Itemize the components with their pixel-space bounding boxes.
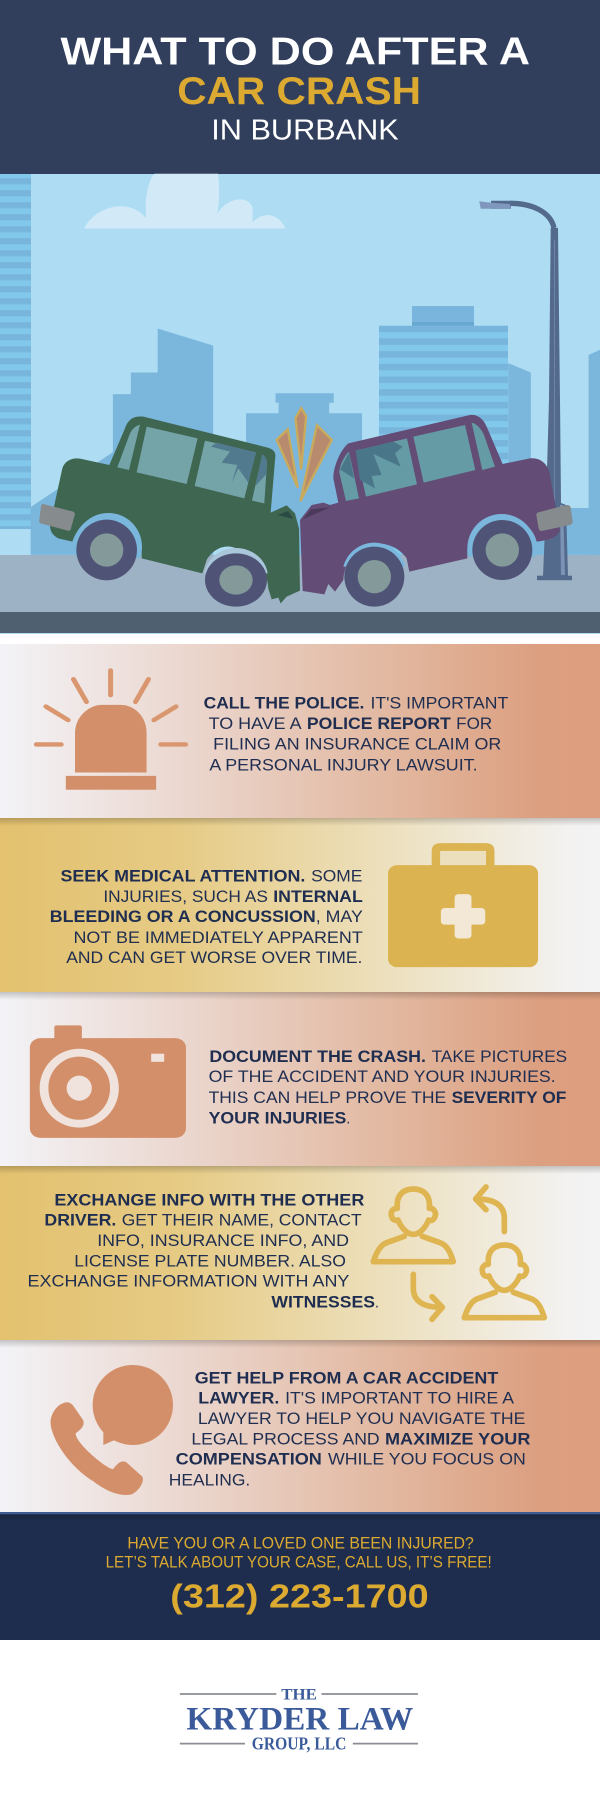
text: call the police: CALL THE POLICE. bbox=[204, 693, 364, 712]
illustration: city crash scene bbox=[0, 174, 600, 634]
text: get help from a lawyer: MAXIMIZE YOUR bbox=[385, 1430, 530, 1448]
text: seek medical attention: BLEEDING OR A CONCUSSION bbox=[50, 907, 316, 926]
title: WHAT TO DO AFTER A bbox=[60, 29, 530, 73]
text: seek medical attention: NOT BE IMMEDIATELY APPARENT bbox=[73, 928, 363, 947]
panel: get help from a lawyer bbox=[0, 1340, 600, 1512]
text: call the police: A PERSONAL INJURY LAWSUIT. bbox=[209, 755, 478, 774]
title bbox=[60, 29, 530, 146]
text: exchange info: EXCHANGE INFORMATION WITH ANY bbox=[28, 1272, 349, 1290]
text: get help from a lawyer bbox=[169, 1369, 530, 1489]
text: seek medical attention: AND CAN GET WORSE OVER TIME. bbox=[66, 948, 362, 967]
text: get help from a lawyer: COMPENSATION bbox=[176, 1450, 322, 1468]
road bbox=[0, 555, 600, 613]
text: get help from a lawyer: WHILE YOU FOCUS ON bbox=[328, 1450, 526, 1468]
call to action text: (312) 223-1700 bbox=[170, 1578, 429, 1615]
text: call the police: TO HAVE A bbox=[209, 714, 302, 733]
text: seek medical attention: , MAY bbox=[316, 907, 363, 926]
text: document the crash: SEVERITY OF bbox=[452, 1088, 566, 1107]
call to action text: LET’S TALK ABOUT YOUR CASE, CALL US, IT’S FREE! bbox=[106, 1553, 492, 1571]
title: IN BURBANK bbox=[211, 114, 399, 146]
panel: call the police bbox=[0, 644, 600, 818]
text: seek medical attention bbox=[50, 867, 363, 967]
logo: the kryder law group: THE bbox=[281, 1685, 317, 1703]
impact burst bbox=[277, 408, 332, 501]
text: seek medical attention: INTERNAL bbox=[273, 887, 363, 906]
text: get help from a lawyer: LAWYER. bbox=[198, 1389, 279, 1407]
text: document the crash: TAKE PICTURES bbox=[432, 1047, 567, 1066]
header panel bbox=[0, 0, 600, 174]
text: exchange info: LICENSE PLATE NUMBER. ALSO bbox=[74, 1252, 346, 1270]
text: exchange info: DRIVER. bbox=[44, 1211, 116, 1229]
text: exchange info: WITNESSES bbox=[271, 1293, 375, 1311]
building: left tower bbox=[0, 174, 31, 529]
call to action text: HAVE YOU OR A LOVED ONE BEEN INJURED? bbox=[127, 1534, 474, 1552]
text: seek medical attention: SOME bbox=[311, 867, 362, 885]
icon: phone and speech bubble bbox=[51, 1365, 173, 1495]
purple car bbox=[300, 415, 573, 607]
logo: the kryder law group: GROUP, LLC bbox=[252, 1734, 346, 1754]
icon: camera bbox=[30, 1025, 186, 1138]
text: call the police bbox=[204, 693, 508, 774]
title: CAR CRASH bbox=[177, 69, 421, 112]
text: document the crash: YOUR INJURIES bbox=[209, 1108, 346, 1127]
text: seek medical attention: SEEK MEDICAL ATTENTION. bbox=[60, 867, 305, 885]
icon: first aid kit bbox=[388, 843, 538, 967]
logo: the kryder law group: KRYDER LAW bbox=[186, 1701, 413, 1737]
text: seek medical attention: INJURIES, SUCH AS bbox=[103, 887, 268, 906]
text: call the police: POLICE REPORT bbox=[307, 714, 451, 733]
text: get help from a lawyer: LAWYER TO HELP YOU NAVIGATE THE bbox=[198, 1409, 525, 1428]
text: document the crash: OF THE ACCIDENT AND YOUR INJURIES. bbox=[209, 1067, 556, 1086]
panel: document the crash bbox=[0, 992, 600, 1166]
background buildings bbox=[31, 328, 600, 555]
text: call the police: IT'S IMPORTANT bbox=[370, 693, 508, 712]
icon: siren bbox=[36, 670, 186, 790]
building: striped tower bbox=[379, 306, 508, 556]
panel: seek medical attention bbox=[0, 818, 600, 992]
curb strip bbox=[0, 612, 600, 633]
panel: call to action bbox=[0, 1512, 600, 1640]
street lamp bbox=[479, 201, 572, 580]
text: document the crash: . bbox=[346, 1108, 350, 1127]
text: exchange info: INFO, INSURANCE INFO, AND bbox=[97, 1231, 349, 1250]
text: get help from a lawyer: IT'S IMPORTANT TO HIRE A bbox=[285, 1389, 514, 1407]
text: get help from a lawyer: HEALING. bbox=[169, 1471, 250, 1489]
text: call the police: FOR bbox=[456, 714, 492, 733]
text: exchange info: GET THEIR NAME, CONTACT bbox=[122, 1211, 362, 1229]
text: document the crash bbox=[209, 1047, 567, 1127]
icon: two people exchanging bbox=[373, 1187, 544, 1319]
text: call the police: FILING AN INSURANCE CLAIM OR bbox=[213, 735, 501, 753]
text: exchange info: EXCHANGE INFO WITH THE OTHER bbox=[54, 1191, 364, 1209]
text: document the crash: THIS CAN HELP PROVE THE bbox=[209, 1088, 446, 1107]
text: document the crash: DOCUMENT THE CRASH. bbox=[209, 1047, 426, 1066]
green car bbox=[39, 416, 300, 607]
panel: exchange info bbox=[0, 1166, 600, 1340]
cloud bbox=[84, 174, 285, 228]
text: get help from a lawyer: LEGAL PROCESS AND bbox=[191, 1430, 380, 1448]
text: exchange info bbox=[28, 1191, 379, 1311]
logo: the kryder law group bbox=[180, 1685, 418, 1754]
text: get help from a lawyer: GET HELP FROM A CAR ACCIDENT bbox=[195, 1369, 498, 1387]
call to action text bbox=[106, 1534, 492, 1615]
text: exchange info: . bbox=[375, 1293, 379, 1311]
